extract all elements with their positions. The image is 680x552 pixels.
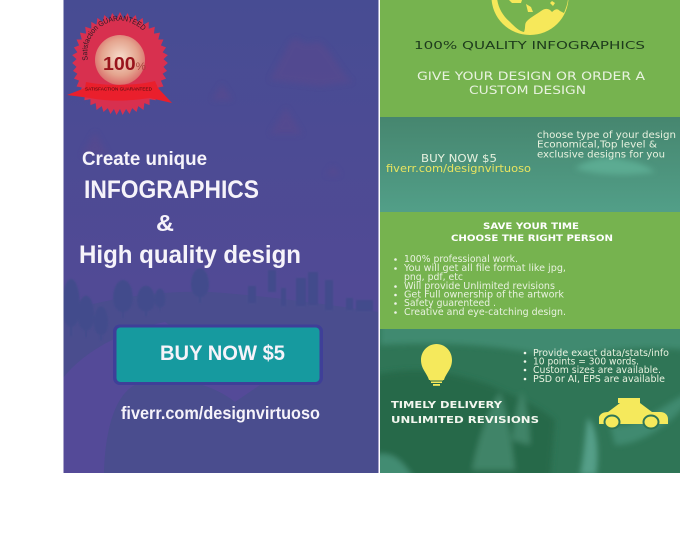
link: yellow fiverr url: fiverr.com/designvirtuoso xyxy=(386,163,531,175)
text: buy now price: BUY NOW $5 xyxy=(421,153,497,165)
trees xyxy=(62,268,373,341)
link: fiverr url: fiverr.com/designvirtuoso xyxy=(121,403,320,423)
badge medallion xyxy=(95,35,145,85)
text: design types: Economical,Top level & xyxy=(537,140,657,150)
list: benefits: Will provide Unlimited revisions xyxy=(404,281,555,292)
road xyxy=(63,322,260,473)
heading: infographics: INFOGRAPHICS xyxy=(84,176,259,204)
text: give your design: GIVE YOUR DESIGN OR ORDER A xyxy=(417,69,645,83)
text: design types xyxy=(537,130,676,160)
list: benefits: Creative and eye-catching design. xyxy=(404,307,566,318)
heading: ampersand: & xyxy=(156,210,174,236)
panel: teal buy now xyxy=(380,117,680,212)
button: buy now: BUY NOW $5 xyxy=(160,341,285,365)
list: benefits xyxy=(394,254,566,318)
icon: globe xyxy=(492,0,568,35)
button: buy now xyxy=(113,324,323,385)
list: specifications xyxy=(524,348,669,385)
icon: light bulb xyxy=(421,344,452,386)
heading: timely delivery: UNLIMITED REVISIONS xyxy=(391,415,539,426)
list: benefits: Get Full ownership of the artwork xyxy=(404,290,564,300)
list: benefits: 100% professional work. xyxy=(404,254,518,265)
panel: purple promo xyxy=(62,0,378,473)
list: benefits: png, pdf, etc xyxy=(404,272,463,283)
heading: save your time xyxy=(451,222,613,244)
panel: top green xyxy=(380,0,680,117)
heading: timely delivery xyxy=(391,400,539,426)
badge 100 percent: 100% xyxy=(103,53,146,74)
heading: timely delivery: TIMELY DELIVERY xyxy=(391,400,503,411)
list: benefits: Safety guarenteed . xyxy=(404,298,496,309)
heading: quality infographics: 100% QUALITY INFOGRAPHICS xyxy=(414,40,645,52)
badge ribbon: SATISFACTION GUARANTEED xyxy=(85,86,153,92)
badge: satisfaction guaranteed xyxy=(67,12,172,115)
list: specifications: PSD or AI, EPS are available xyxy=(533,374,665,385)
list: specifications: Custom sizes are available. xyxy=(533,365,661,376)
icon: taxi xyxy=(599,398,668,430)
list: benefits: You will get all file format like jpg, xyxy=(403,263,566,274)
text: give your design: CUSTOM DESIGN xyxy=(469,83,586,97)
badge arc text: Satisfaction GUARANTEED xyxy=(82,16,146,60)
heading: save your time: SAVE YOUR TIME xyxy=(483,222,579,232)
heading: high quality design: High quality design xyxy=(79,241,301,269)
text: design types: exclusive designs for you xyxy=(537,150,665,160)
list: specifications: 10 points = 300 words. xyxy=(533,356,639,368)
heading: save your time: CHOOSE THE RIGHT PERSON xyxy=(451,234,613,244)
text: design types: choose type of your design xyxy=(537,130,676,141)
list: specifications: Provide exact data/stats/info xyxy=(533,348,669,359)
text: give your design xyxy=(417,69,645,97)
heading: create unique xyxy=(79,149,301,269)
hill xyxy=(63,292,378,473)
panel: save your time xyxy=(380,212,680,329)
heading: create unique: Create unique xyxy=(82,149,207,170)
panel: timely delivery xyxy=(380,329,680,473)
